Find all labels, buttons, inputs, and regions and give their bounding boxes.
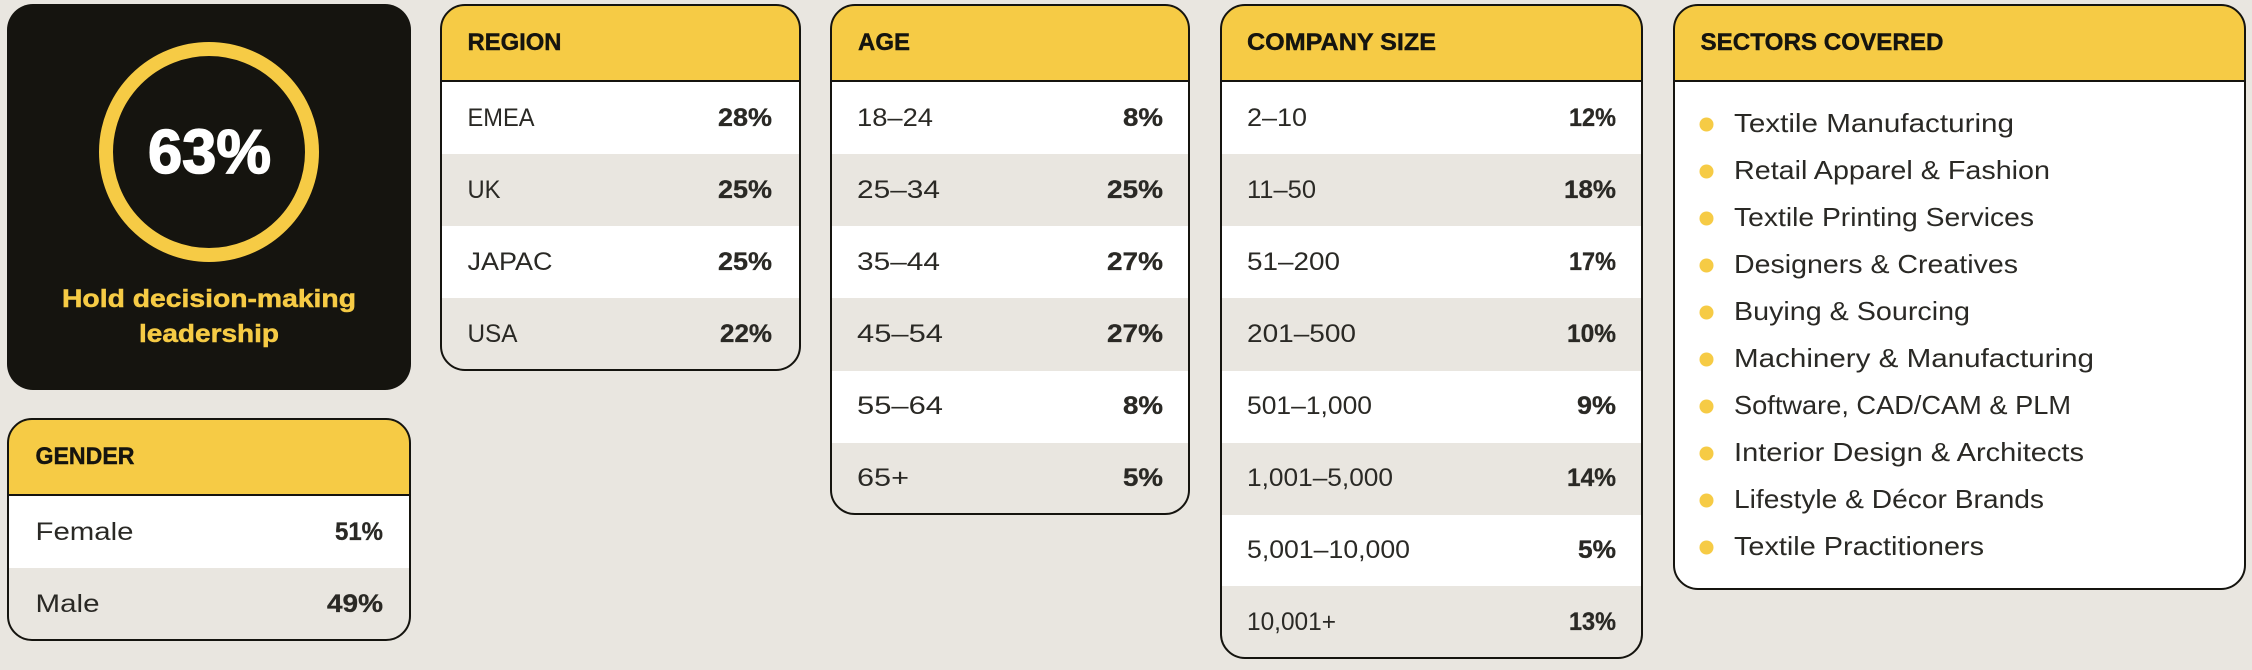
row: 45–54: 27% <box>1107 320 1163 348</box>
row: EMEA: 28% <box>718 104 772 132</box>
row: 11–50: 18% <box>1564 176 1616 204</box>
row: 35–44: 35–44 <box>857 248 940 276</box>
row: 201–500: 10% <box>1567 320 1616 348</box>
icon: yellow ring <box>106 49 312 255</box>
panel: gender <box>7 418 411 641</box>
item: Retail Apparel & Fashion: Retail Apparel & Fashion <box>1734 155 2050 185</box>
row: 501–1,000 <box>1247 392 1616 420</box>
heading: sectors covered: SECTORS COVERED <box>1700 29 1944 56</box>
row: 45–54: 45–54 <box>857 320 943 348</box>
row: male: Male <box>36 590 100 618</box>
row: 18–24: 8% <box>1123 104 1163 132</box>
row: 5,001–10,000: 5% <box>1578 536 1616 564</box>
row: 2–10: 2–10 <box>1247 104 1307 132</box>
row: 25–34: 25% <box>1107 176 1163 204</box>
row: 10,001+ <box>1247 608 1616 636</box>
row: 35–44: 27% <box>1107 248 1163 276</box>
row: 5,001–10,000 <box>1247 536 1616 564</box>
row: female: 51% <box>335 518 383 546</box>
panel: sectors covered <box>1673 4 2246 590</box>
row: 201–500 <box>1247 320 1616 348</box>
row: 51–200: 17% <box>1569 248 1616 276</box>
row: JAPAC: 25% <box>718 248 772 276</box>
row: JAPAC: JAPAC <box>468 248 552 276</box>
row: 1,001–5,000: 1,001–5,000 <box>1247 464 1393 492</box>
row: 55–64: 55–64 <box>857 392 943 420</box>
row: EMEA <box>468 104 772 132</box>
row: 65+: 5% <box>1123 464 1163 492</box>
row: female <box>36 518 383 546</box>
heading: gender: GENDER <box>36 443 134 470</box>
row: 18–24 <box>857 104 1163 132</box>
row: 35–44 <box>857 248 1163 276</box>
row: 201–500: 201–500 <box>1247 320 1356 348</box>
row: UK <box>468 176 772 204</box>
item: Software, CAD/CAM & PLM: Software, CAD/CAM & PLM <box>1734 390 2071 420</box>
stat caption: leadership <box>139 320 279 348</box>
row: 5,001–10,000: 5,001–10,000 <box>1247 536 1410 564</box>
row: 65+: 65+ <box>857 464 909 492</box>
row: 2–10 <box>1247 104 1616 132</box>
item: Lifestyle & Décor Brands: Lifestyle & Décor Brands <box>1734 484 2044 514</box>
row: 51–200 <box>1247 248 1616 276</box>
row: UK: 25% <box>718 176 772 204</box>
stat caption <box>62 285 356 348</box>
row: 55–64: 8% <box>1123 392 1163 420</box>
item: Buying & Sourcing: Buying & Sourcing <box>1734 296 1970 326</box>
row: 51–200: 51–200 <box>1247 248 1340 276</box>
row: 45–54 <box>857 320 1163 348</box>
row: 2–10: 12% <box>1569 104 1616 132</box>
row: 1,001–5,000: 14% <box>1567 464 1616 492</box>
item: Textile Practitioners: Textile Practitioners <box>1734 531 1984 561</box>
row: USA <box>468 320 772 348</box>
row: 10,001+: 13% <box>1569 608 1616 636</box>
row: male <box>36 590 383 618</box>
item: Machinery & Manufacturing: Machinery & Manufacturing <box>1734 343 2094 373</box>
row: USA: 22% <box>720 320 772 348</box>
heading: region: REGION <box>468 29 562 56</box>
item: Interior Design & Architects: Interior Design & Architects <box>1734 437 2084 467</box>
row: USA: USA <box>468 320 518 348</box>
panel: age <box>830 4 1190 515</box>
row: 501–1,000: 501–1,000 <box>1247 392 1372 420</box>
item: Textile Printing Services: Textile Printing Services <box>1734 202 2034 232</box>
row: 11–50: 11–50 <box>1247 176 1316 204</box>
row: 65+ <box>857 464 1163 492</box>
heading: company size: COMPANY SIZE <box>1247 29 1436 56</box>
item: Textile Manufacturing: Textile Manufacturing <box>1734 108 2014 138</box>
row: UK: UK <box>468 176 501 204</box>
row: JAPAC <box>468 248 772 276</box>
panel: decision-making leadership stat <box>7 4 411 390</box>
row: male: 49% <box>327 590 383 618</box>
stat value: 63% <box>148 118 271 187</box>
row: 18–24: 18–24 <box>857 104 933 132</box>
stat caption: Hold decision-making <box>62 285 356 313</box>
row: 501–1,000: 9% <box>1577 392 1616 420</box>
panel: company size <box>1220 4 1643 659</box>
row: 25–34 <box>857 176 1163 204</box>
item: Designers & Creatives: Designers & Creatives <box>1734 249 2018 279</box>
row: 55–64 <box>857 392 1163 420</box>
row: 1,001–5,000 <box>1247 464 1616 492</box>
row: 25–34: 25–34 <box>857 176 940 204</box>
row: 11–50 <box>1247 176 1616 204</box>
row: 10,001+: 10,001+ <box>1247 608 1336 636</box>
row: EMEA: EMEA <box>468 104 535 132</box>
heading: age: AGE <box>858 29 910 56</box>
row: female: Female <box>36 518 134 546</box>
panel: region <box>440 4 801 371</box>
